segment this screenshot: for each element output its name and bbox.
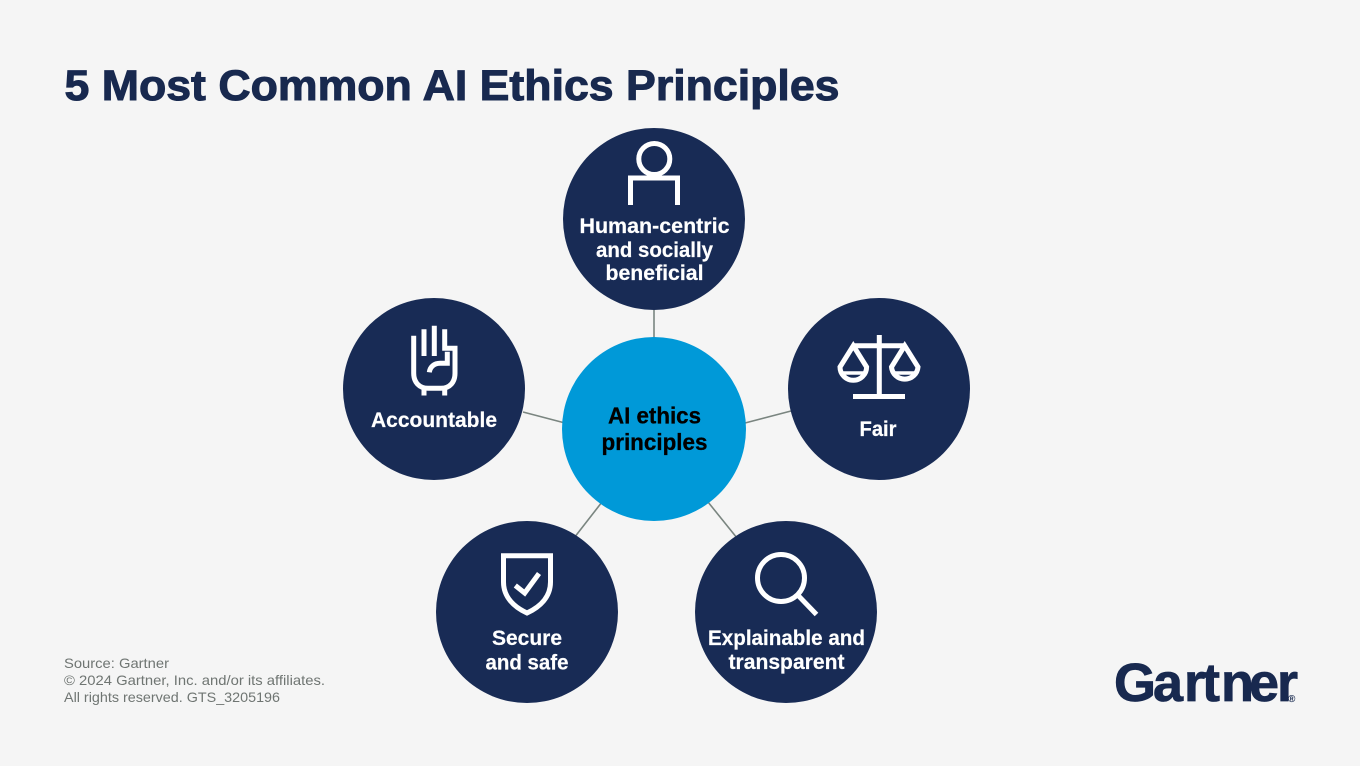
title: 5 Most Common AI Ethics Principles bbox=[64, 62, 840, 110]
label: secure and safe: and safe bbox=[486, 652, 568, 674]
source note: © 2024 Gartner, Inc. and/or its affiliates. bbox=[64, 672, 325, 688]
connector lines bbox=[523, 308, 791, 538]
label: accountable: Accountable bbox=[371, 409, 497, 432]
panel: accountable bbox=[343, 298, 525, 480]
logo: Gartner: ® bbox=[1288, 694, 1296, 705]
label: explainable and transparent: transparent bbox=[728, 651, 845, 674]
icon: magnifier bbox=[758, 554, 816, 614]
icon: shield with check bbox=[504, 556, 550, 613]
source note: All rights reserved. GTS_3205196 bbox=[64, 689, 280, 705]
panel: explainable and transparent bbox=[695, 521, 877, 703]
label: AI ethics principles: principles bbox=[602, 429, 708, 455]
icon: raised hand bbox=[414, 326, 455, 396]
panel: center hub bbox=[562, 337, 746, 521]
label: human-centric: Human-centric bbox=[580, 215, 730, 238]
panel: human-centric bbox=[563, 128, 745, 310]
icon: scales bbox=[840, 335, 918, 396]
source note: Source: Gartner bbox=[64, 655, 169, 671]
logo: Gartner: Gartner bbox=[1114, 653, 1298, 713]
label: explainable and transparent: Explainable and bbox=[708, 627, 865, 650]
label: secure and safe: Secure bbox=[492, 627, 562, 650]
panel: fair bbox=[788, 298, 970, 480]
label: AI ethics principles: AI ethics bbox=[608, 402, 701, 428]
label: fair: Fair bbox=[860, 418, 896, 441]
label: human-centric: and socially bbox=[596, 239, 713, 262]
panel: secure and safe bbox=[436, 521, 618, 703]
label: human-centric: beneficial bbox=[606, 262, 704, 285]
icon: person bbox=[630, 144, 678, 205]
